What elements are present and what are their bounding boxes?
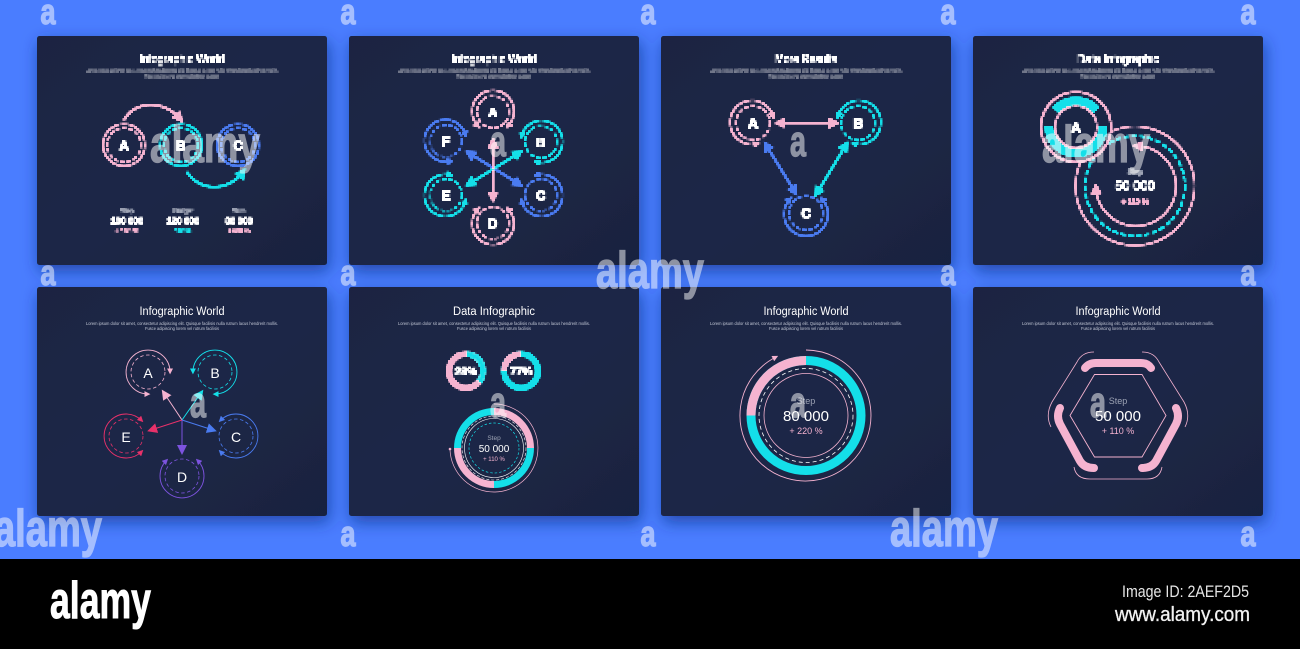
big ring: Step [1127,167,1143,176]
progress ring: Step [797,396,815,406]
watermarks: a [790,378,806,427]
progress ring: + 220 % [789,426,823,436]
stat: sum: 80 000 [225,216,253,226]
heading: More Results [775,54,837,66]
hexagon diagram: + 110 % [1102,426,1134,436]
big ring: 50 000 [1115,178,1155,193]
footer logo: alamy [50,572,151,630]
arrow: B to C [817,145,846,193]
hexagon diagram [1048,352,1188,479]
intro text: Fusce adipiscing lorem vel rutrum facilisis [457,326,532,331]
donut 28%: 28% [455,366,477,378]
donut 77%: 77% [510,366,532,378]
intro text: Fusce adipiscing lorem vel rutrum facilisis [1081,74,1156,79]
small ring A: A [1071,120,1081,135]
stat: step: 100 000 [111,216,143,226]
circle B [160,124,202,166]
intro text [1022,68,1214,79]
intro text [86,68,278,79]
stat: sum [225,208,253,235]
panel: data donuts [398,306,590,492]
intro text: Fusce adipiscing lorem vel rutrum facilisis [1081,326,1156,331]
circle E: E [442,188,451,203]
hexagon diagram: 50 000 [1095,408,1141,425]
circle F: F [442,134,450,149]
intro text: Lorem ipsum dolor sit amet, consectetur adipiscing elit. Quisque facilisis nulla rutrum lacus hendrerit mollis. [398,68,590,73]
circle B [518,113,570,167]
arrow: A to B [124,105,180,120]
circle E [417,170,469,224]
intro text: Fusce adipiscing lorem vel rutrum facilisis [457,74,532,79]
circle D [472,207,514,245]
footer bar [0,559,1300,649]
stat: sum: +280 % [228,228,250,235]
stat: sum: Sum [232,208,246,215]
circle C [219,414,258,458]
stat: step: + 180 % [115,228,139,235]
heading: Data Infographic [453,306,535,318]
circle C [518,170,570,224]
stat: step: Step [120,208,134,215]
watermarks: a [1090,378,1106,427]
image id: Image ID: 2AEF2D5 [1122,582,1249,601]
stat: budget [167,208,199,235]
big ring [1076,126,1194,246]
watermarks: a [1240,513,1256,554]
panel: hexagon [1022,306,1214,479]
circle B: B [536,135,546,150]
panel: six step hub [398,54,590,245]
circle A [103,124,145,166]
circle D: D [177,469,187,485]
stat: step [111,208,143,235]
intro text: Lorem ipsum dolor sit amet, consectetur adipiscing elit. Quisque facilisis nulla rutrum lacus hendrerit mollis. [710,68,902,73]
panel: five step hub [86,306,278,498]
watermarks: a [40,252,56,293]
watermarks: a [340,252,356,293]
intro text [398,321,590,331]
arrow: cyan diagonal [469,153,519,184]
intro text: Fusce adipiscing lorem vel rutrum facilisis [769,326,844,331]
heading: Data Infographic [1077,54,1159,66]
watermarks: a [640,513,656,554]
intro text: Fusce adipiscing lorem vel rutrum facilisis [145,74,220,79]
watermarks: a [490,117,506,166]
intro text [1022,321,1214,331]
panel: data infographic rings [1022,54,1214,246]
progress ring [740,350,871,481]
circle B: B [853,115,863,131]
watermarks: a [490,378,506,427]
circle C: C [536,188,546,203]
heading: Infographic World [140,306,224,318]
watermarks: alamy [1042,116,1150,174]
circle B: B [176,138,186,153]
circle F [417,112,469,166]
watermarks: alamy [150,116,260,174]
progress ring: 80 000 [783,408,829,425]
circle A [472,90,514,128]
panel: triangle results [710,54,902,236]
circle A: A [748,115,758,131]
panel cards [37,36,1263,516]
circle D: D [488,216,498,231]
arrow: A to C [766,145,795,192]
stat: budget: 100% [175,228,192,235]
circle C [784,196,828,236]
website: www.alamy.com [1114,604,1250,626]
arrow: pink vertical [492,142,494,198]
circle D [160,459,204,498]
intro text: Lorem ipsum dolor sit amet, consectetur adipiscing elit. Quisque facilisis nulla rutrum lacus hendrerit mollis. [86,321,278,326]
small ring A [1041,92,1111,162]
watermarks: a [940,252,956,293]
panel: three step cycle [86,54,278,235]
intro text: Lorem ipsum dolor sit amet, consectetur adipiscing elit. Quisque facilisis nulla rutrum lacus hendrerit mollis. [398,321,590,326]
intro text: Fusce adipiscing lorem vel rutrum facilisis [769,74,844,79]
circle C: C [231,429,241,445]
watermarks: a [340,513,356,554]
heading: Infographic World [452,54,536,66]
circle C: C [233,138,243,153]
intro text [710,68,902,79]
hub arrows [151,393,213,451]
progress ring: + 110 % [483,457,506,463]
watermarks: a [1240,252,1256,293]
arrow: A to B [779,122,835,124]
top row panels (mosaic) [86,54,1214,246]
circle A [117,341,175,399]
circle C [217,124,259,166]
arrow: blue diagonal [469,153,519,184]
circle A: A [119,138,129,153]
intro text: Lorem ipsum dolor sit amet, consectetur adipiscing elit. Quisque facilisis nulla rutrum lacus hendrerit mollis. [1022,68,1214,73]
watermarks: alamy [890,500,998,558]
intro text [710,321,902,331]
heading: Infographic World [764,306,848,318]
circle E: E [121,429,131,445]
heading: Infographic World [1076,306,1160,318]
intro text [86,321,278,331]
circle B [188,341,246,399]
progress ring [449,404,538,492]
big ring: + 110 % [1121,197,1149,206]
circle A [722,92,776,149]
donuts 28% and 77% [449,354,538,388]
intro text: Lorem ipsum dolor sit amet, consectetur adipiscing elit. Quisque facilisis nulla rutrum lacus hendrerit mollis. [710,321,902,326]
intro text: Lorem ipsum dolor sit amet, consectetur adipiscing elit. Quisque facilisis nulla rutrum lacus hendrerit mollis. [86,68,278,73]
circle E [104,414,143,458]
watermarks: alamy [596,242,704,300]
intro text [398,68,590,79]
circle A: A [143,365,153,381]
circle B [835,92,889,149]
stat: budget: 120 000 [167,216,199,226]
progress ring: 50 000 [479,444,510,455]
heading: Infographic World [140,54,224,66]
intro text: Lorem ipsum dolor sit amet, consectetur adipiscing elit. Quisque facilisis nulla rutrum lacus hendrerit mollis. [1022,321,1214,326]
watermarks: a [790,117,806,166]
hexagon diagram: Step [1109,396,1127,406]
circle A: A [488,105,498,120]
circle B: B [210,365,220,381]
circle C: C [801,205,811,221]
progress ring: Step [487,435,501,442]
arrow: B to C [187,172,243,187]
panel: big ring [710,306,902,481]
stat: budget: Budget [173,208,193,215]
intro text: Fusce adipiscing lorem vel rutrum facilisis [145,326,220,331]
watermarks: a [190,378,206,427]
